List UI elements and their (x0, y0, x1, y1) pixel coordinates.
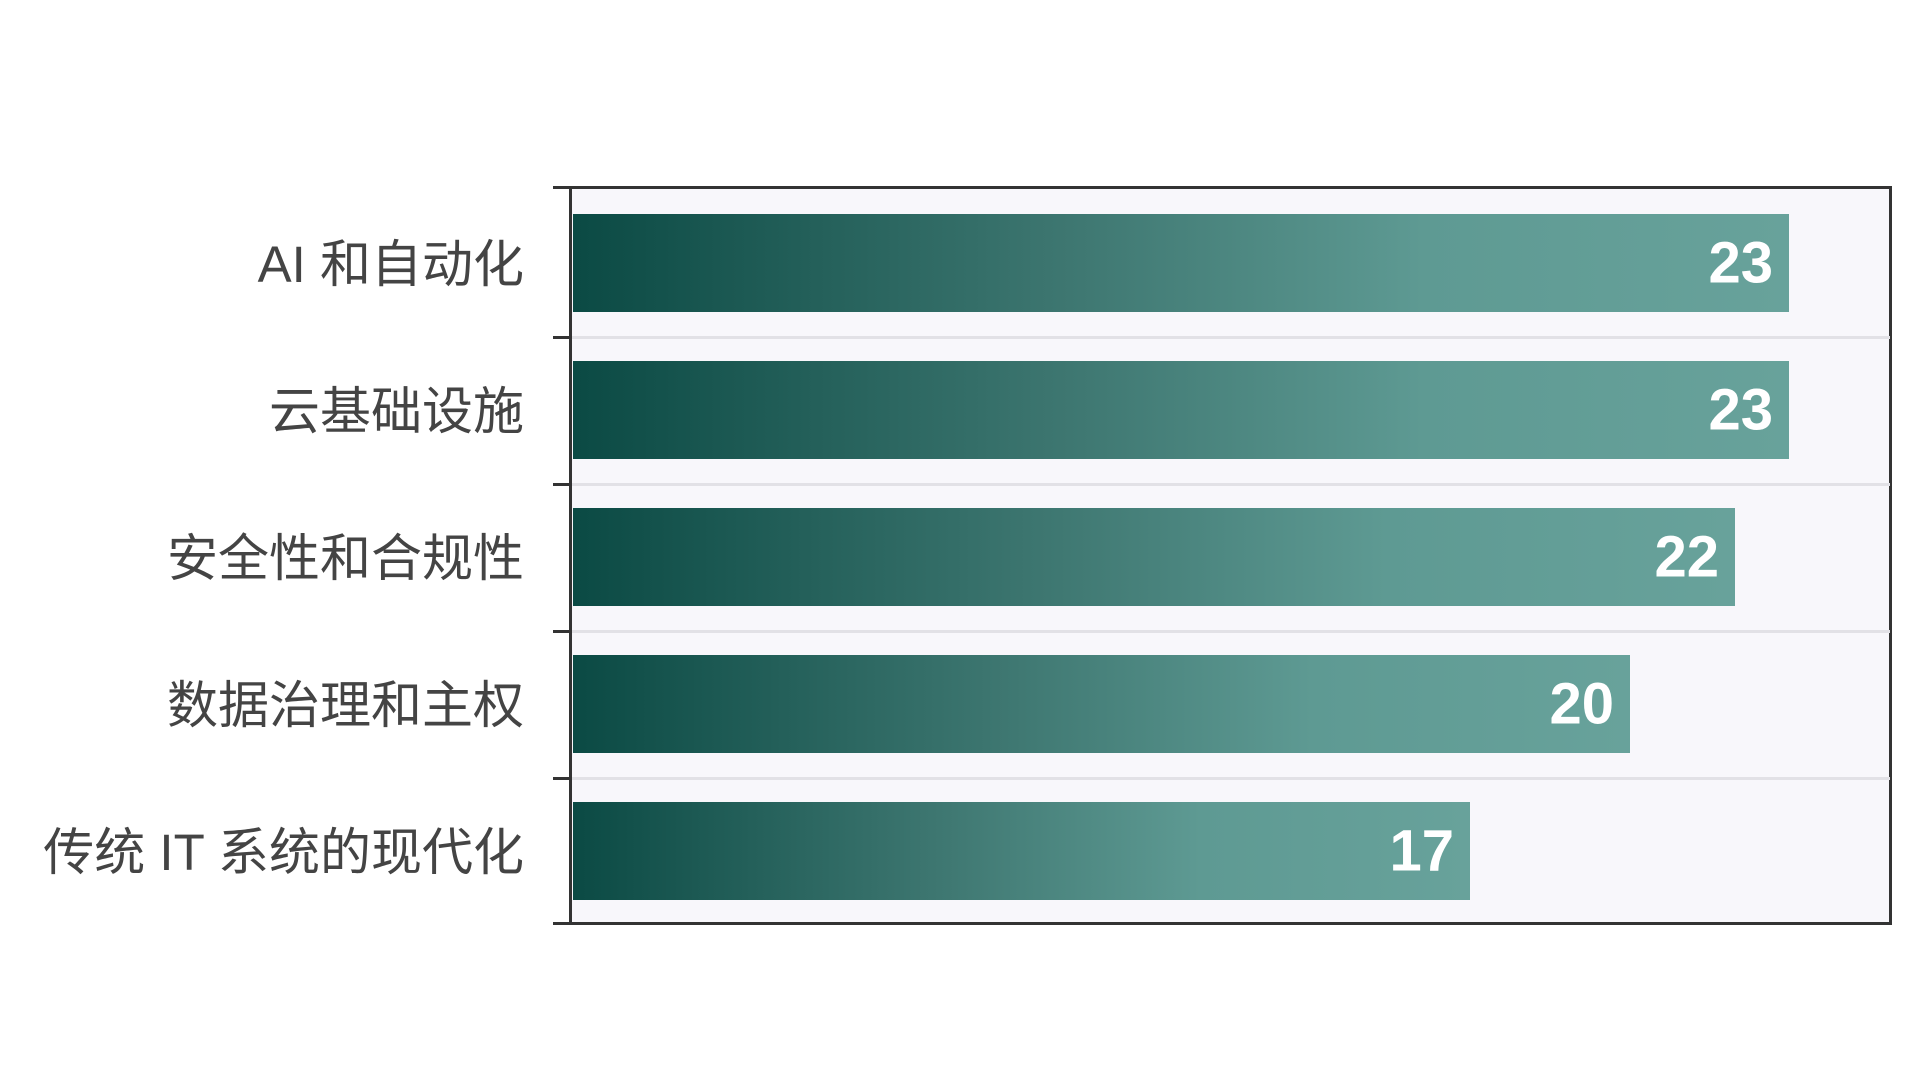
label: AI: AI 和自动化 (258, 236, 524, 293)
bar: legacy IT: 17 (1389, 818, 1454, 884)
label: security: 安全性和合规性 (167, 530, 524, 587)
bar: cloud (573, 361, 1789, 459)
bar: security: 22 (1654, 524, 1719, 590)
label: cloud: 云基础设施 (269, 383, 524, 440)
bar: data (573, 655, 1630, 753)
label: data: 数据治理和主权 (167, 677, 524, 734)
bar: data: 20 (1549, 672, 1614, 736)
bar: security (573, 508, 1735, 606)
bar: AI: 23 (1708, 230, 1773, 296)
bar: legacy IT (573, 802, 1470, 900)
bar: cloud: 23 (1708, 378, 1773, 442)
chart frame (569, 186, 1892, 925)
bar: AI (573, 214, 1789, 312)
label: legacy: 传统 IT 系统的现代化 (43, 824, 524, 881)
